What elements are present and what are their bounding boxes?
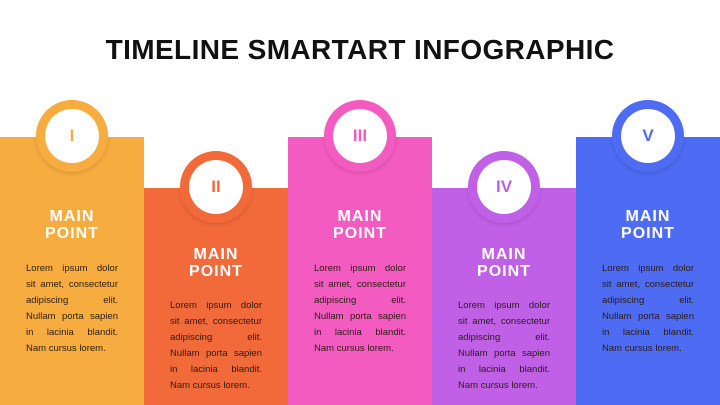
text IV: in lacinia blandit. bbox=[458, 364, 550, 375]
text I: Lorem ipsum dolor bbox=[26, 263, 118, 274]
text II: Nullam porta sapien bbox=[170, 348, 262, 359]
panel: point IV bbox=[432, 188, 576, 405]
text II bbox=[170, 300, 262, 391]
text I: Nullam porta sapien bbox=[26, 311, 118, 322]
text I: in lacinia blandit. bbox=[26, 327, 118, 338]
panel: point V bbox=[576, 137, 720, 405]
text III bbox=[314, 263, 406, 354]
heading III: MAIN bbox=[338, 208, 382, 225]
text V: Nam cursus lorem. bbox=[602, 343, 682, 354]
icon: circle II bbox=[180, 151, 252, 223]
text IV: adipiscing elit. bbox=[458, 332, 550, 343]
text IV: sit amet, consectetur bbox=[458, 316, 550, 327]
icon: circle III bbox=[324, 100, 396, 172]
text V bbox=[602, 263, 694, 354]
panel: point I bbox=[0, 137, 144, 405]
icon: circle I bbox=[36, 100, 108, 172]
text IV: Nullam porta sapien bbox=[458, 348, 550, 359]
heading III: POINT bbox=[333, 225, 387, 242]
text II: sit amet, consectetur bbox=[170, 316, 262, 327]
icon: circle II: II bbox=[211, 177, 221, 196]
icon: circle IV: IV bbox=[496, 177, 512, 196]
heading I bbox=[45, 208, 99, 242]
heading V: POINT bbox=[621, 225, 675, 242]
text IV: Lorem ipsum dolor bbox=[458, 300, 550, 311]
text II: in lacinia blandit. bbox=[170, 364, 262, 375]
text IV: Nam cursus lorem. bbox=[458, 380, 538, 391]
heading II: MAIN bbox=[194, 246, 238, 263]
heading V bbox=[621, 208, 675, 242]
text V: Nullam porta sapien bbox=[602, 311, 694, 322]
text V: Lorem ipsum dolor bbox=[602, 263, 694, 274]
heading II: POINT bbox=[189, 263, 243, 280]
panel: point II bbox=[144, 188, 288, 405]
text II: Nam cursus lorem. bbox=[170, 380, 250, 391]
text III: Nullam porta sapien bbox=[314, 311, 406, 322]
text II: Lorem ipsum dolor bbox=[170, 300, 262, 311]
icon: circle IV bbox=[468, 151, 540, 223]
icon: circle V: V bbox=[642, 126, 654, 145]
text V: adipiscing elit. bbox=[602, 295, 694, 306]
text I: Nam cursus lorem. bbox=[26, 343, 106, 354]
heading IV: POINT bbox=[477, 263, 531, 280]
heading IV: MAIN bbox=[482, 246, 526, 263]
text I bbox=[26, 263, 118, 354]
text IV bbox=[458, 300, 550, 391]
heading III bbox=[333, 208, 387, 242]
heading II bbox=[189, 246, 243, 280]
icon: circle I: I bbox=[70, 126, 74, 145]
text III: Nam cursus lorem. bbox=[314, 343, 394, 354]
text III: adipiscing elit. bbox=[314, 295, 406, 306]
text II: adipiscing elit. bbox=[170, 332, 262, 343]
text III: in lacinia blandit. bbox=[314, 327, 406, 338]
icon: circle V bbox=[612, 100, 684, 172]
text I: sit amet, consectetur bbox=[26, 279, 118, 290]
heading I: MAIN bbox=[50, 208, 94, 225]
icon: circle III: III bbox=[353, 126, 367, 145]
text III: Lorem ipsum dolor bbox=[314, 263, 406, 274]
panel: point III bbox=[288, 137, 432, 405]
text V: in lacinia blandit. bbox=[602, 327, 694, 338]
heading IV bbox=[477, 246, 531, 280]
heading I: POINT bbox=[45, 225, 99, 242]
title: TIMELINE SMARTART INFOGRAPHIC bbox=[106, 34, 614, 65]
text III: sit amet, consectetur bbox=[314, 279, 406, 290]
text I: adipiscing elit. bbox=[26, 295, 118, 306]
text V: sit amet, consectetur bbox=[602, 279, 694, 290]
heading V: MAIN bbox=[626, 208, 670, 225]
